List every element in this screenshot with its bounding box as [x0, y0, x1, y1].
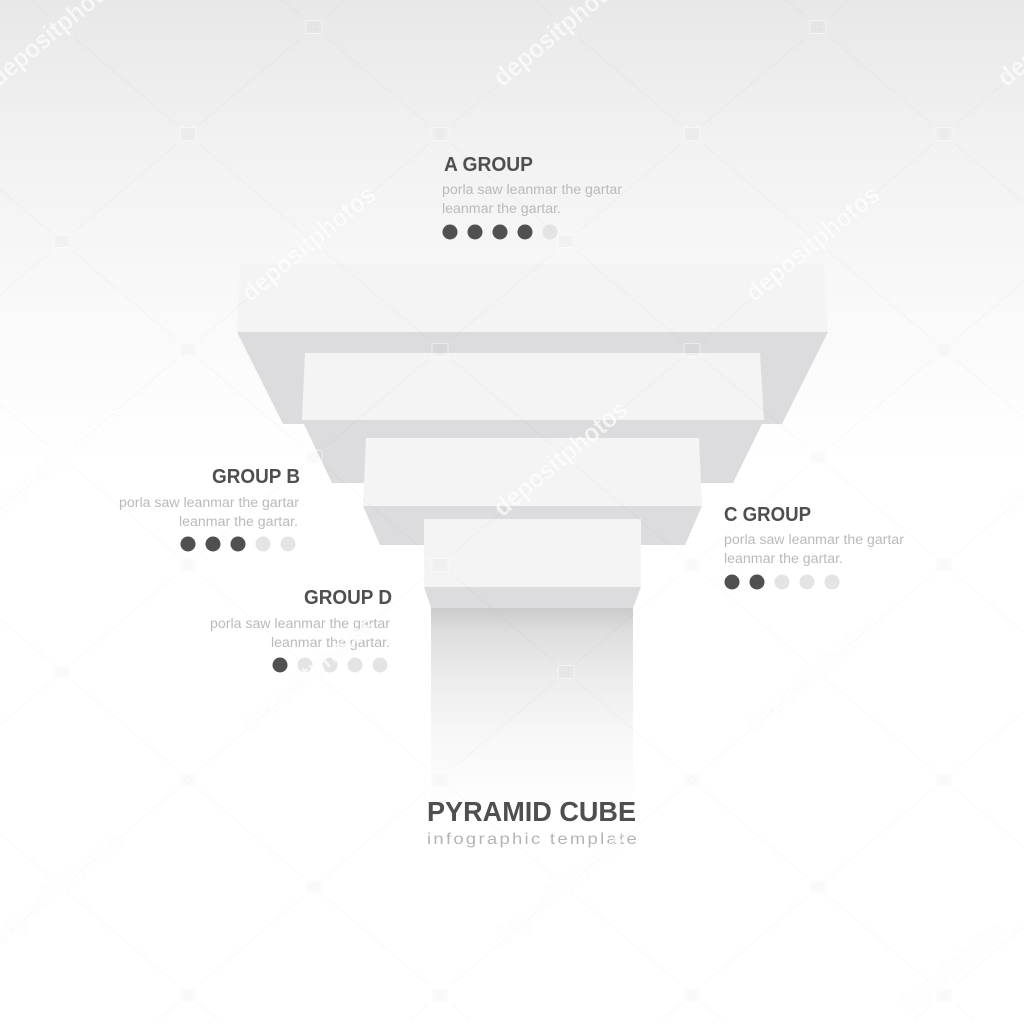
watermark overlay: depositphotos — [487, 394, 633, 522]
panel: tier 2 front face — [302, 353, 764, 420]
panel: tier 4 front face — [424, 519, 641, 587]
text block: A GROUP — [442, 154, 623, 240]
heading: GROUP D: GROUP D — [304, 587, 392, 609]
heading: A GROUP: A GROUP — [444, 154, 533, 176]
heading: GROUP B: GROUP B — [212, 466, 300, 488]
rating dots: 4 of 5 — [442, 224, 558, 240]
panel: tier 3 front face — [363, 438, 702, 506]
rating dots: 2 of 5 — [724, 574, 840, 590]
description: GROUP D: leanmar the gartar. — [271, 635, 390, 650]
description: C GROUP: leanmar the gartar. — [724, 551, 843, 566]
panel: tier 3 underside — [363, 506, 702, 545]
panel: tier 1 underside — [237, 332, 828, 424]
panel: fading base column — [431, 608, 633, 813]
text block: GROUP D — [210, 587, 392, 672]
heading: C GROUP: C GROUP — [724, 504, 811, 526]
description: GROUP D — [210, 616, 391, 650]
text block: GROUP B — [119, 466, 300, 552]
description: GROUP B: leanmar the gartar. — [179, 514, 298, 529]
description: A GROUP: leanmar the gartar. — [442, 201, 561, 216]
description: GROUP D: porla saw leanmar the gartar — [210, 616, 391, 631]
description: GROUP B: porla saw leanmar the gartar — [119, 495, 300, 510]
text block: C GROUP — [724, 504, 905, 590]
title: PYRAMID CUBE — [427, 796, 636, 827]
watermark overlay: depositphotos — [739, 179, 885, 307]
panel: tier 2 underside — [302, 420, 764, 483]
description: A GROUP: porla saw leanmar the gartar — [442, 182, 623, 197]
description: A GROUP — [442, 182, 623, 216]
pyramid cube — [237, 264, 828, 813]
subtitle: infographic template — [427, 831, 639, 848]
watermark overlay: depositphotos — [235, 179, 381, 307]
description: C GROUP: porla saw leanmar the gartar — [724, 532, 905, 547]
description: GROUP B — [119, 495, 300, 529]
panel: tier 1 front face — [237, 264, 828, 332]
watermark overlay: depositphotos — [739, 609, 885, 737]
panel: tier 4 underside — [424, 587, 641, 608]
rating dots: 1 of 5 — [272, 658, 388, 672]
rating dots: 3 of 5 — [180, 536, 296, 552]
watermark overlay: depositphotos — [487, 824, 633, 952]
background gradient — [0, 0, 1024, 460]
watermark overlay: depositphotos — [235, 609, 381, 737]
description: C GROUP — [724, 532, 905, 566]
